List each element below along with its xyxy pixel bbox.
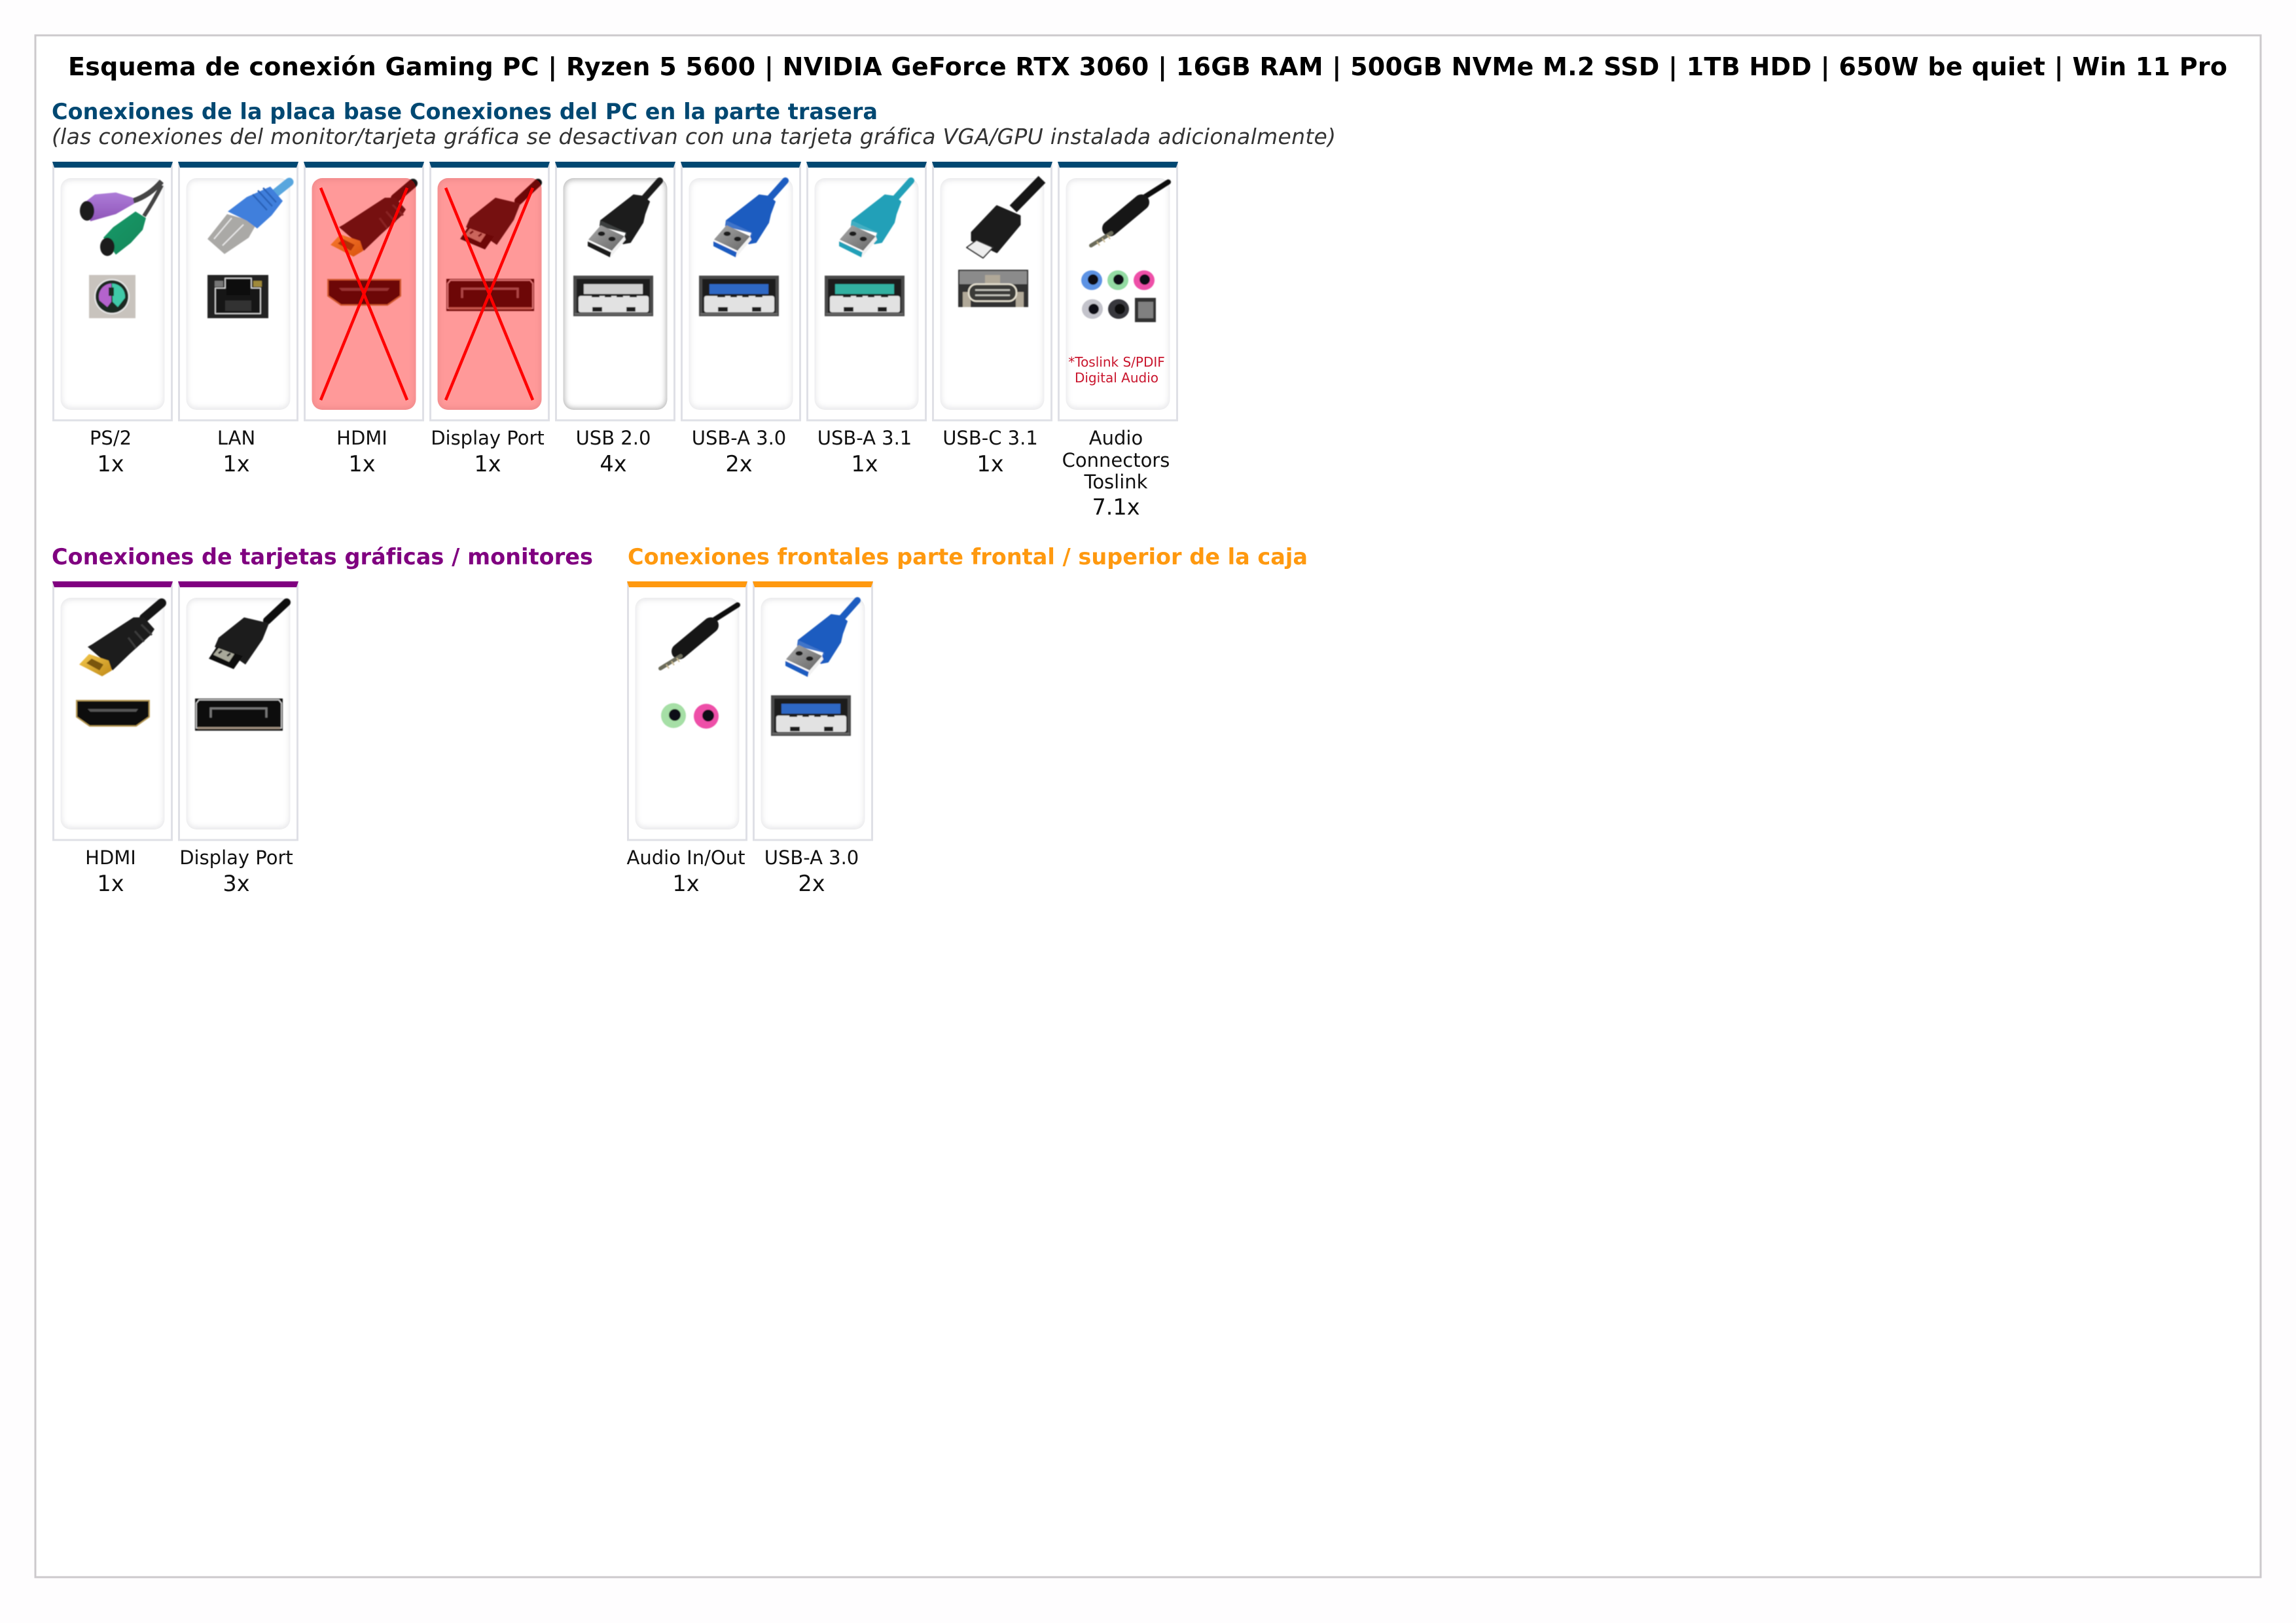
label: HDMI: HDMI: [85, 847, 136, 869]
icon: DisplayPort socket: [195, 699, 283, 731]
panel: front case connector cards: [627, 581, 873, 896]
label: Audio Connectors Toslink: Audio: [1089, 427, 1143, 449]
quantity: 1x: 1x: [97, 871, 124, 896]
card: Audio In/Out: [627, 581, 747, 896]
icon: USB-A 3.1 plug: [839, 181, 911, 257]
label: Audio Connectors Toslink: Toslink: [1084, 471, 1148, 493]
icon: HDMI plug: [79, 603, 162, 676]
quantity: 1x: 1x: [97, 451, 124, 477]
label: Display Port: Display Port: [431, 427, 545, 449]
card: USB-A 3.0: [753, 581, 873, 896]
label: USB 2.0: USB 2.0: [576, 427, 651, 449]
label: USB-A 3.0: USB-A 3.0: [692, 427, 786, 449]
label: Audio Connectors Toslink: Connectors: [1062, 449, 1170, 471]
icon: audio jack plug: [1091, 182, 1168, 246]
card: LAN: [178, 162, 298, 477]
icon: HDMI socket: [328, 280, 401, 305]
icon: USB-A 3.1 socket: [825, 276, 905, 316]
label: PS/2: PS/2: [90, 427, 132, 449]
icon: DisplayPort plug: [460, 183, 538, 249]
icon: USB-A 3.0 socket: [771, 695, 851, 736]
quantity: 1x: 1x: [851, 451, 878, 477]
card: HDMI: [52, 581, 173, 896]
label: Display Port: Display Port: [179, 847, 293, 869]
icon: HDMI plug: [331, 183, 413, 257]
icon: audio sockets: [1081, 270, 1156, 322]
card: PS/2: [52, 162, 173, 477]
card: USB-C 3.1: [932, 162, 1052, 477]
icon: USB-A 3.0 socket: [699, 276, 779, 316]
icon: LAN plug: [207, 182, 289, 254]
note: Toslink S/PDIF: *Toslink S/PDIF: [1068, 354, 1165, 370]
label: LAN: LAN: [217, 427, 255, 449]
icon: PS/2 plugs: [80, 181, 162, 256]
icon: audio sockets: [661, 703, 719, 729]
quantity: 2x: 2x: [725, 451, 753, 477]
title: Esquema de conexión Gaming PC | Ryzen 5 5600 | NVIDIA GeForce RTX 3060 | 16GB RAM | 500GB NVMe M.2 SSD | 1TB HDD | 650W be quiet | Win 11 Pro: [68, 52, 2227, 82]
icon: HDMI socket: [77, 701, 149, 726]
icon: USB-C plug: [967, 179, 1042, 258]
icon: DisplayPort socket: [446, 279, 534, 311]
icon: red cross: [446, 188, 533, 400]
label: USB-C 3.1: USB-C 3.1: [942, 427, 1038, 449]
panel: graphics card connector cards: [52, 581, 298, 896]
heading: graphics card connections: Conexiones de tarjetas gráficas / monitores: [52, 544, 593, 570]
note: Digital Audio: Digital Audio: [1075, 370, 1158, 386]
card: Audio Connectors Toslink: [1058, 162, 1178, 520]
quantity: 3x: 3x: [223, 871, 250, 896]
icon: USB-C socket: [958, 270, 1028, 307]
red overlay: [437, 178, 542, 410]
quantity: 1x: 1x: [474, 451, 501, 477]
icon: DisplayPort plug: [209, 602, 287, 669]
icon: red cross: [321, 188, 407, 400]
icon: LAN socket: [207, 275, 268, 318]
label: USB-A 3.0: USB-A 3.0: [764, 847, 859, 869]
quantity: 2x: 2x: [798, 871, 825, 896]
icon: USB 2.0 socket: [573, 276, 653, 316]
card: HDMI (disabled): [304, 162, 424, 477]
card: Display Port (disabled): [429, 162, 550, 477]
icon: USB-A 3.0 plug: [785, 600, 857, 677]
label: USB-A 3.1: USB-A 3.1: [817, 427, 912, 449]
icon: PS/2 socket: [89, 275, 135, 318]
quantity: 4x: 4x: [600, 451, 627, 477]
quantity: 1x: 1x: [672, 871, 700, 896]
icon: audio jack plug: [660, 605, 738, 668]
card: Display Port: [178, 581, 298, 896]
label: Audio In/Out: Audio In/Out: [627, 847, 745, 869]
heading: front connections: Conexiones frontales parte frontal / superior de la caja: [628, 544, 1308, 570]
panel: motherboard rear connector cards: [52, 162, 1178, 520]
quantity: 1x: 1x: [977, 451, 1004, 477]
red overlay: [312, 178, 416, 410]
card: USB-A 3.0: [681, 162, 801, 477]
quantity: 1x: 1x: [223, 451, 250, 477]
icon: USB-A 3.0 plug: [713, 181, 785, 257]
icon: USB 2.0 plug: [588, 181, 660, 257]
quantity: 7.1x: 7.1x: [1092, 494, 1140, 520]
note: monitor/graphics card connectors disabled: (las conexiones del monitor/tarjeta gráfica se desactivan con una tarjeta gráfica VGA/GPU instalada adicionalmente): [52, 124, 1336, 149]
card: USB 2.0: [555, 162, 675, 477]
quantity: 1x: 1x: [348, 451, 376, 477]
label: HDMI: HDMI: [336, 427, 387, 449]
card: USB-A 3.1: [806, 162, 927, 477]
heading: motherboard rear connections: Conexiones de la placa base Conexiones del PC en la parte trasera: [52, 99, 878, 124]
